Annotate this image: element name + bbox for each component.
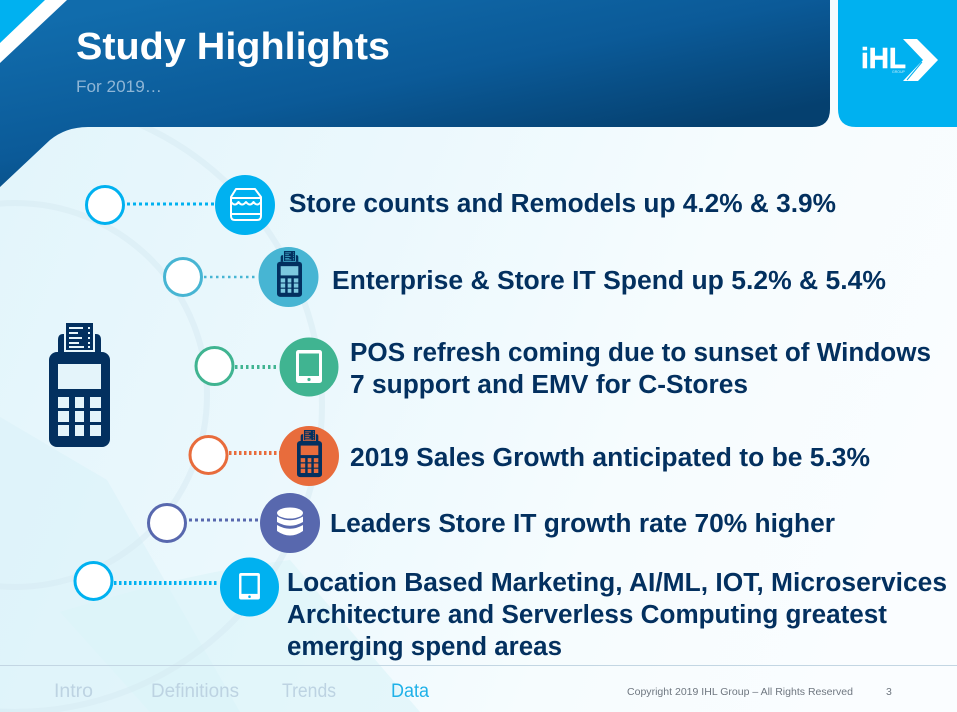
icon: store xyxy=(231,189,261,220)
navigation tabs: Trends xyxy=(282,681,336,702)
icon: tablet xyxy=(239,573,260,600)
icon: POS terminal xyxy=(277,251,302,297)
item 2: IT spend xyxy=(164,247,886,307)
item 4: sales growth: 2019 Sales Growth anticipated to be 5.3% xyxy=(350,444,870,472)
item 6: emerging spend: emerging spend areas xyxy=(287,633,562,661)
item 3: POS refresh: POS refresh coming due to sunset of Windows xyxy=(350,339,931,367)
corner accent xyxy=(0,0,67,63)
item 3: POS refresh: 7 support and EMV for C-Stores xyxy=(350,371,748,399)
item 5: leaders growth: Leaders Store IT growth rate 70% higher xyxy=(330,510,835,538)
navigation tabs: Data xyxy=(391,681,429,702)
title: Study Highlights xyxy=(76,26,390,68)
item 6: emerging spend xyxy=(75,558,947,661)
item 2: IT spend: Enterprise & Store IT Spend up 5.2% & 5.4% xyxy=(332,267,886,295)
icon: database xyxy=(277,508,303,536)
footer xyxy=(0,666,957,702)
item 6: emerging spend: Location Based Marketing, AI/ML, IOT, Microservices xyxy=(287,569,947,597)
item 6: emerging spend: Architecture and Serverless Computing greatest xyxy=(287,601,888,629)
item 5: leaders growth xyxy=(148,493,835,553)
logo panel: GROUP xyxy=(892,70,906,74)
navigation tabs: Definitions xyxy=(151,681,239,702)
navigation tabs xyxy=(54,681,429,702)
item 3: POS refresh xyxy=(196,338,931,399)
logo panel xyxy=(838,0,957,127)
footer: 3 xyxy=(886,686,892,698)
large POS terminal icon xyxy=(49,322,110,447)
icon: POS terminal xyxy=(297,430,322,477)
subtitle: For 2019… xyxy=(76,77,162,96)
item 4: sales growth xyxy=(190,426,870,486)
logo panel: iHL xyxy=(861,43,906,75)
item 1: store counts: Store counts and Remodels up 4.2% & 3.9% xyxy=(289,190,836,218)
icon: tablet xyxy=(296,350,322,383)
footer: Copyright 2019 IHL Group – All Rights Reserved xyxy=(627,686,853,698)
item 1: store counts xyxy=(86,175,836,235)
navigation tabs: Intro xyxy=(54,681,93,702)
header banner xyxy=(0,0,830,187)
